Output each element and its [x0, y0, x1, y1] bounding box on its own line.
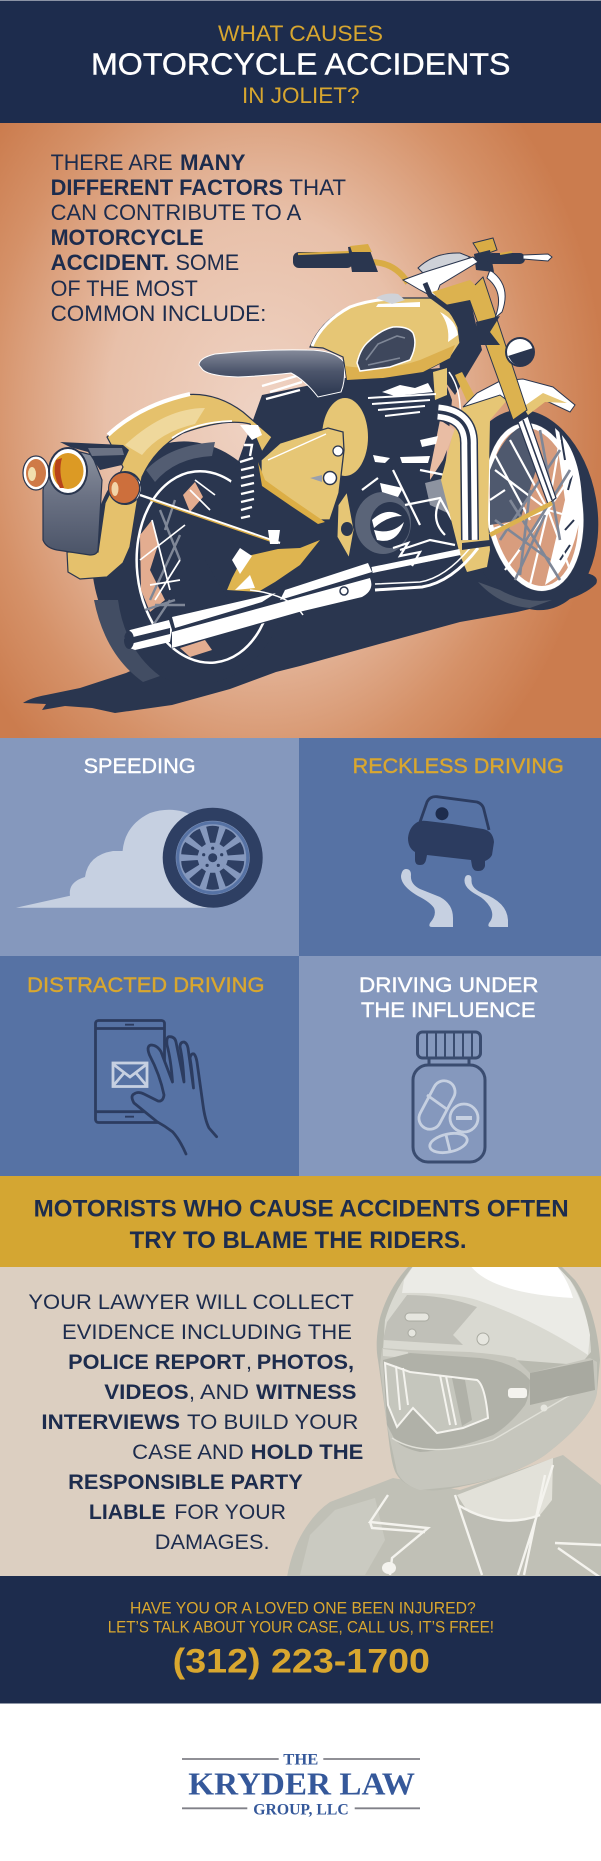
tail box and lamps	[23, 442, 142, 555]
muffler	[124, 563, 375, 650]
front fork	[467, 277, 556, 535]
body text: PHOTOS,	[257, 1350, 354, 1374]
body text: CASE AND	[132, 1440, 244, 1464]
rear axle rod	[140, 495, 280, 543]
body text: POLICE REPORT	[68, 1350, 245, 1374]
yellow lower frame patch	[227, 540, 320, 592]
engine fins	[368, 394, 436, 416]
intro text: OF THE MOST	[51, 276, 198, 301]
icon: skidding car	[408, 797, 494, 871]
panel: driving under the influence	[299, 956, 601, 1176]
illustration: helmeted rider	[287, 1265, 601, 1578]
body text: AND	[200, 1380, 249, 1404]
panel: distracted driving	[0, 956, 299, 1176]
heading: SPEEDING	[84, 755, 196, 778]
body text	[28, 1290, 363, 1554]
intro text: THERE ARE	[51, 150, 173, 175]
panel: motorcycle hero	[0, 123, 601, 738]
visor brim	[380, 1348, 597, 1490]
strap	[530, 1360, 595, 1405]
intro text: MOTORCYCLE	[51, 225, 204, 250]
chrome exhaust pipes	[372, 412, 478, 590]
heading: THE INFLUENCE	[361, 999, 536, 1022]
header panel	[0, 1, 601, 123]
big engine mass	[230, 368, 466, 589]
rear fender	[67, 394, 272, 579]
fuel tank	[310, 294, 460, 380]
heading: RECKLESS DRIVING	[353, 755, 564, 778]
title line: what causes: WHAT CAUSES	[218, 21, 383, 46]
ground shadow	[23, 560, 597, 713]
icon: hand	[132, 1037, 217, 1154]
intro text: SOME	[176, 250, 239, 275]
intro text: CAN CONTRIBUTE TO A	[51, 200, 302, 225]
helmet shell	[377, 1265, 600, 1490]
gold banner: MOTORISTS WHO CAUSE ACCIDENTS OFTEN	[34, 1196, 569, 1223]
body text: HOLD THE	[251, 1440, 363, 1464]
illustration: motorcycle	[23, 238, 601, 713]
front fender	[441, 379, 575, 572]
tank knee pad	[357, 327, 415, 371]
handlebars	[293, 238, 552, 310]
body text: ,	[189, 1380, 195, 1404]
title line: motorcycle accidents: MOTORCYCLE ACCIDENTS	[91, 46, 510, 82]
helmet dark patch	[383, 1295, 477, 1345]
gold banner: TRY TO BLAME THE RIDERS.	[130, 1227, 467, 1254]
side panel yellow pieces	[258, 398, 368, 558]
body text: VIDEOS	[104, 1380, 189, 1404]
yellow struts	[433, 368, 447, 400]
heading	[359, 974, 538, 1022]
panel: reckless driving	[299, 738, 601, 956]
body text: WITNESS	[256, 1380, 356, 1404]
body text: EVIDENCE INCLUDING THE	[62, 1320, 352, 1344]
phone number: (312) 223-1700	[173, 1643, 430, 1681]
body text: DAMAGES.	[155, 1530, 270, 1554]
logo: the kryder law group: GROUP, LLC	[253, 1801, 349, 1818]
body text: ,	[246, 1350, 252, 1374]
body text: FOR YOUR	[174, 1500, 286, 1524]
heading: DISTRACTED DRIVING	[27, 974, 265, 997]
intro text: MANY	[180, 150, 246, 175]
call to action footer	[0, 1576, 601, 1704]
icon: phone	[96, 1020, 164, 1122]
logo: the kryder law group: KRYDER LAW	[188, 1765, 415, 1801]
neck dark	[440, 300, 482, 395]
body text: LIABLE	[89, 1500, 166, 1524]
body text: RESPONSIBLE PARTY	[68, 1470, 303, 1494]
icon: pill bottle	[413, 1032, 485, 1162]
intro text: DIFFERENT FACTORS	[51, 175, 283, 200]
icon: pills	[415, 1077, 478, 1156]
body text: TO BUILD YOUR	[187, 1410, 358, 1434]
icon: envelope	[113, 1063, 147, 1086]
call to action footer: LET’S TALK ABOUT YOUR CASE, CALL US, IT’S FREE!	[108, 1618, 494, 1636]
goggles	[385, 1363, 488, 1433]
intro text: ACCIDENT.	[51, 250, 169, 275]
panel: lawyer evidence	[0, 1265, 601, 1578]
icon: wheel	[163, 808, 263, 908]
intro text: COMMON INCLUDE:	[51, 301, 266, 326]
gold banner	[0, 1176, 601, 1267]
title line: in joliet: IN JOLIET?	[242, 83, 360, 108]
peach gap in frame	[430, 420, 455, 480]
body text: YOUR LAWYER WILL COLLECT	[28, 1290, 354, 1314]
heading: DRIVING UNDER	[359, 974, 538, 997]
logo: the kryder law group	[182, 1751, 420, 1818]
neck and shirt	[457, 1458, 553, 1522]
jacket	[287, 1455, 601, 1577]
intro text	[51, 150, 346, 326]
body text: INTERVIEWS	[41, 1410, 180, 1434]
icon: dust cloud	[16, 810, 213, 908]
headlamp	[487, 270, 535, 367]
front wheel	[478, 411, 598, 610]
face opening	[383, 1353, 530, 1452]
call to action footer: HAVE YOU OR A LOVED ONE BEEN INJURED?	[130, 1599, 476, 1617]
rear wheel	[93, 441, 265, 682]
chin bar line	[392, 1395, 570, 1450]
crankcase	[355, 436, 462, 570]
rear suspension	[240, 375, 302, 518]
seat	[199, 350, 345, 397]
icon: skid marks	[401, 869, 508, 927]
panel: speeding	[0, 738, 299, 956]
logo: the kryder law group: THE	[283, 1751, 318, 1768]
intro text: THAT	[289, 175, 346, 200]
